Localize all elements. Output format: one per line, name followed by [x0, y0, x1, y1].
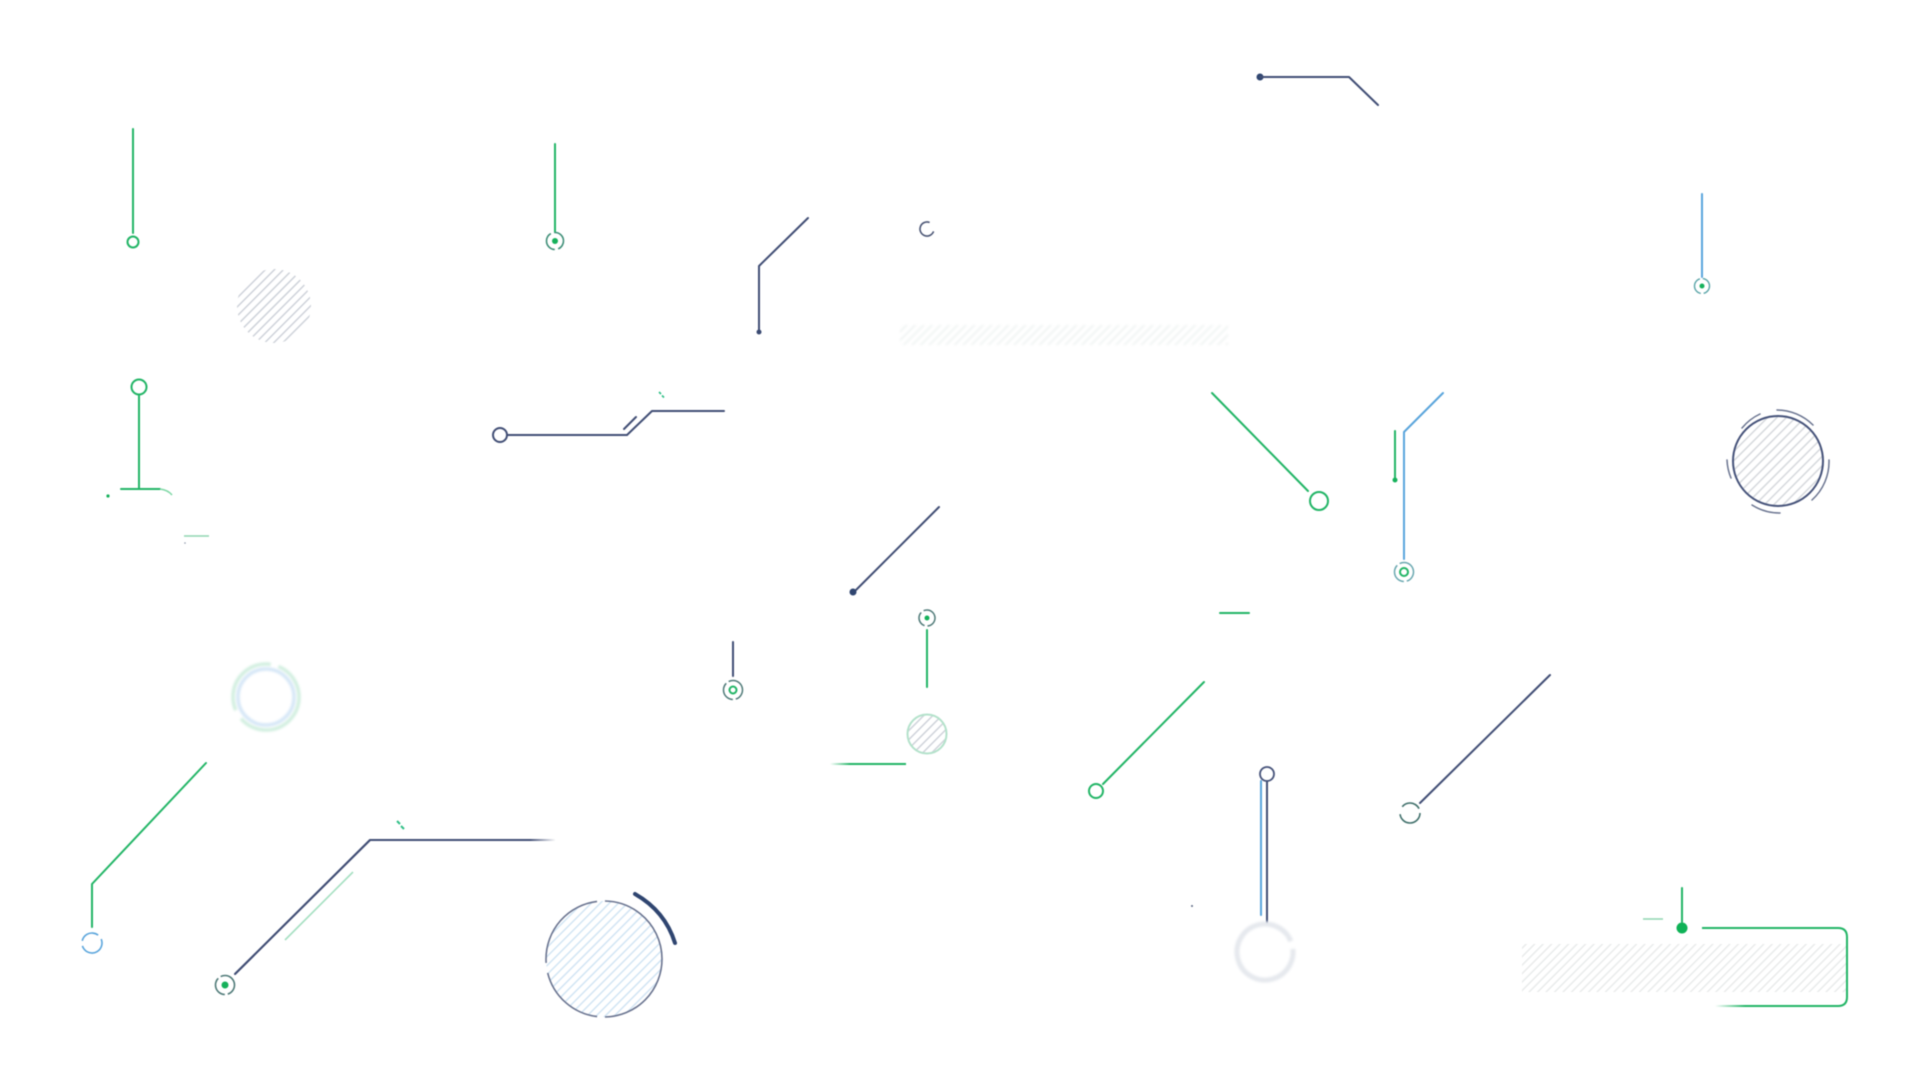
hatched band top centre [900, 325, 1228, 345]
connector: navy diagonal with target, bottom left [216, 821, 555, 994]
connector: navy elbow top [1256, 74, 1378, 105]
connector: navy diagonal lower right [1400, 675, 1550, 823]
thin double pin with pale ring [1191, 767, 1299, 986]
connector: green diagonal lower centre [1089, 682, 1204, 798]
connector: green elbow lower left with ring [78, 763, 206, 957]
connector: green pin top left [128, 129, 138, 248]
connector: green target pin top [546, 144, 564, 250]
connector: blue elbow with green pin [1392, 393, 1443, 582]
hatched band with green bracket, bottom right [1522, 888, 1847, 1006]
pale double ring, left [233, 664, 299, 730]
connector: navy elbow top centre [756, 218, 808, 334]
connector: green diagonal to ring [1212, 393, 1328, 510]
target pin centre left [724, 642, 742, 700]
hatched circle top left [237, 269, 311, 343]
connector: navy diagonal centre [850, 507, 939, 596]
target pin with hatched circle, centre [830, 610, 946, 764]
icon: small open ring [918, 220, 936, 238]
short green dash [1220, 612, 1249, 614]
connector: navy step with ring [493, 392, 724, 442]
connector: blue target pin top right [1694, 194, 1710, 294]
hatched circle with navy arc, bottom [546, 894, 675, 1017]
connector: green pin with bar, left [106, 380, 209, 544]
hatched circle with arcs, right [1727, 410, 1829, 513]
